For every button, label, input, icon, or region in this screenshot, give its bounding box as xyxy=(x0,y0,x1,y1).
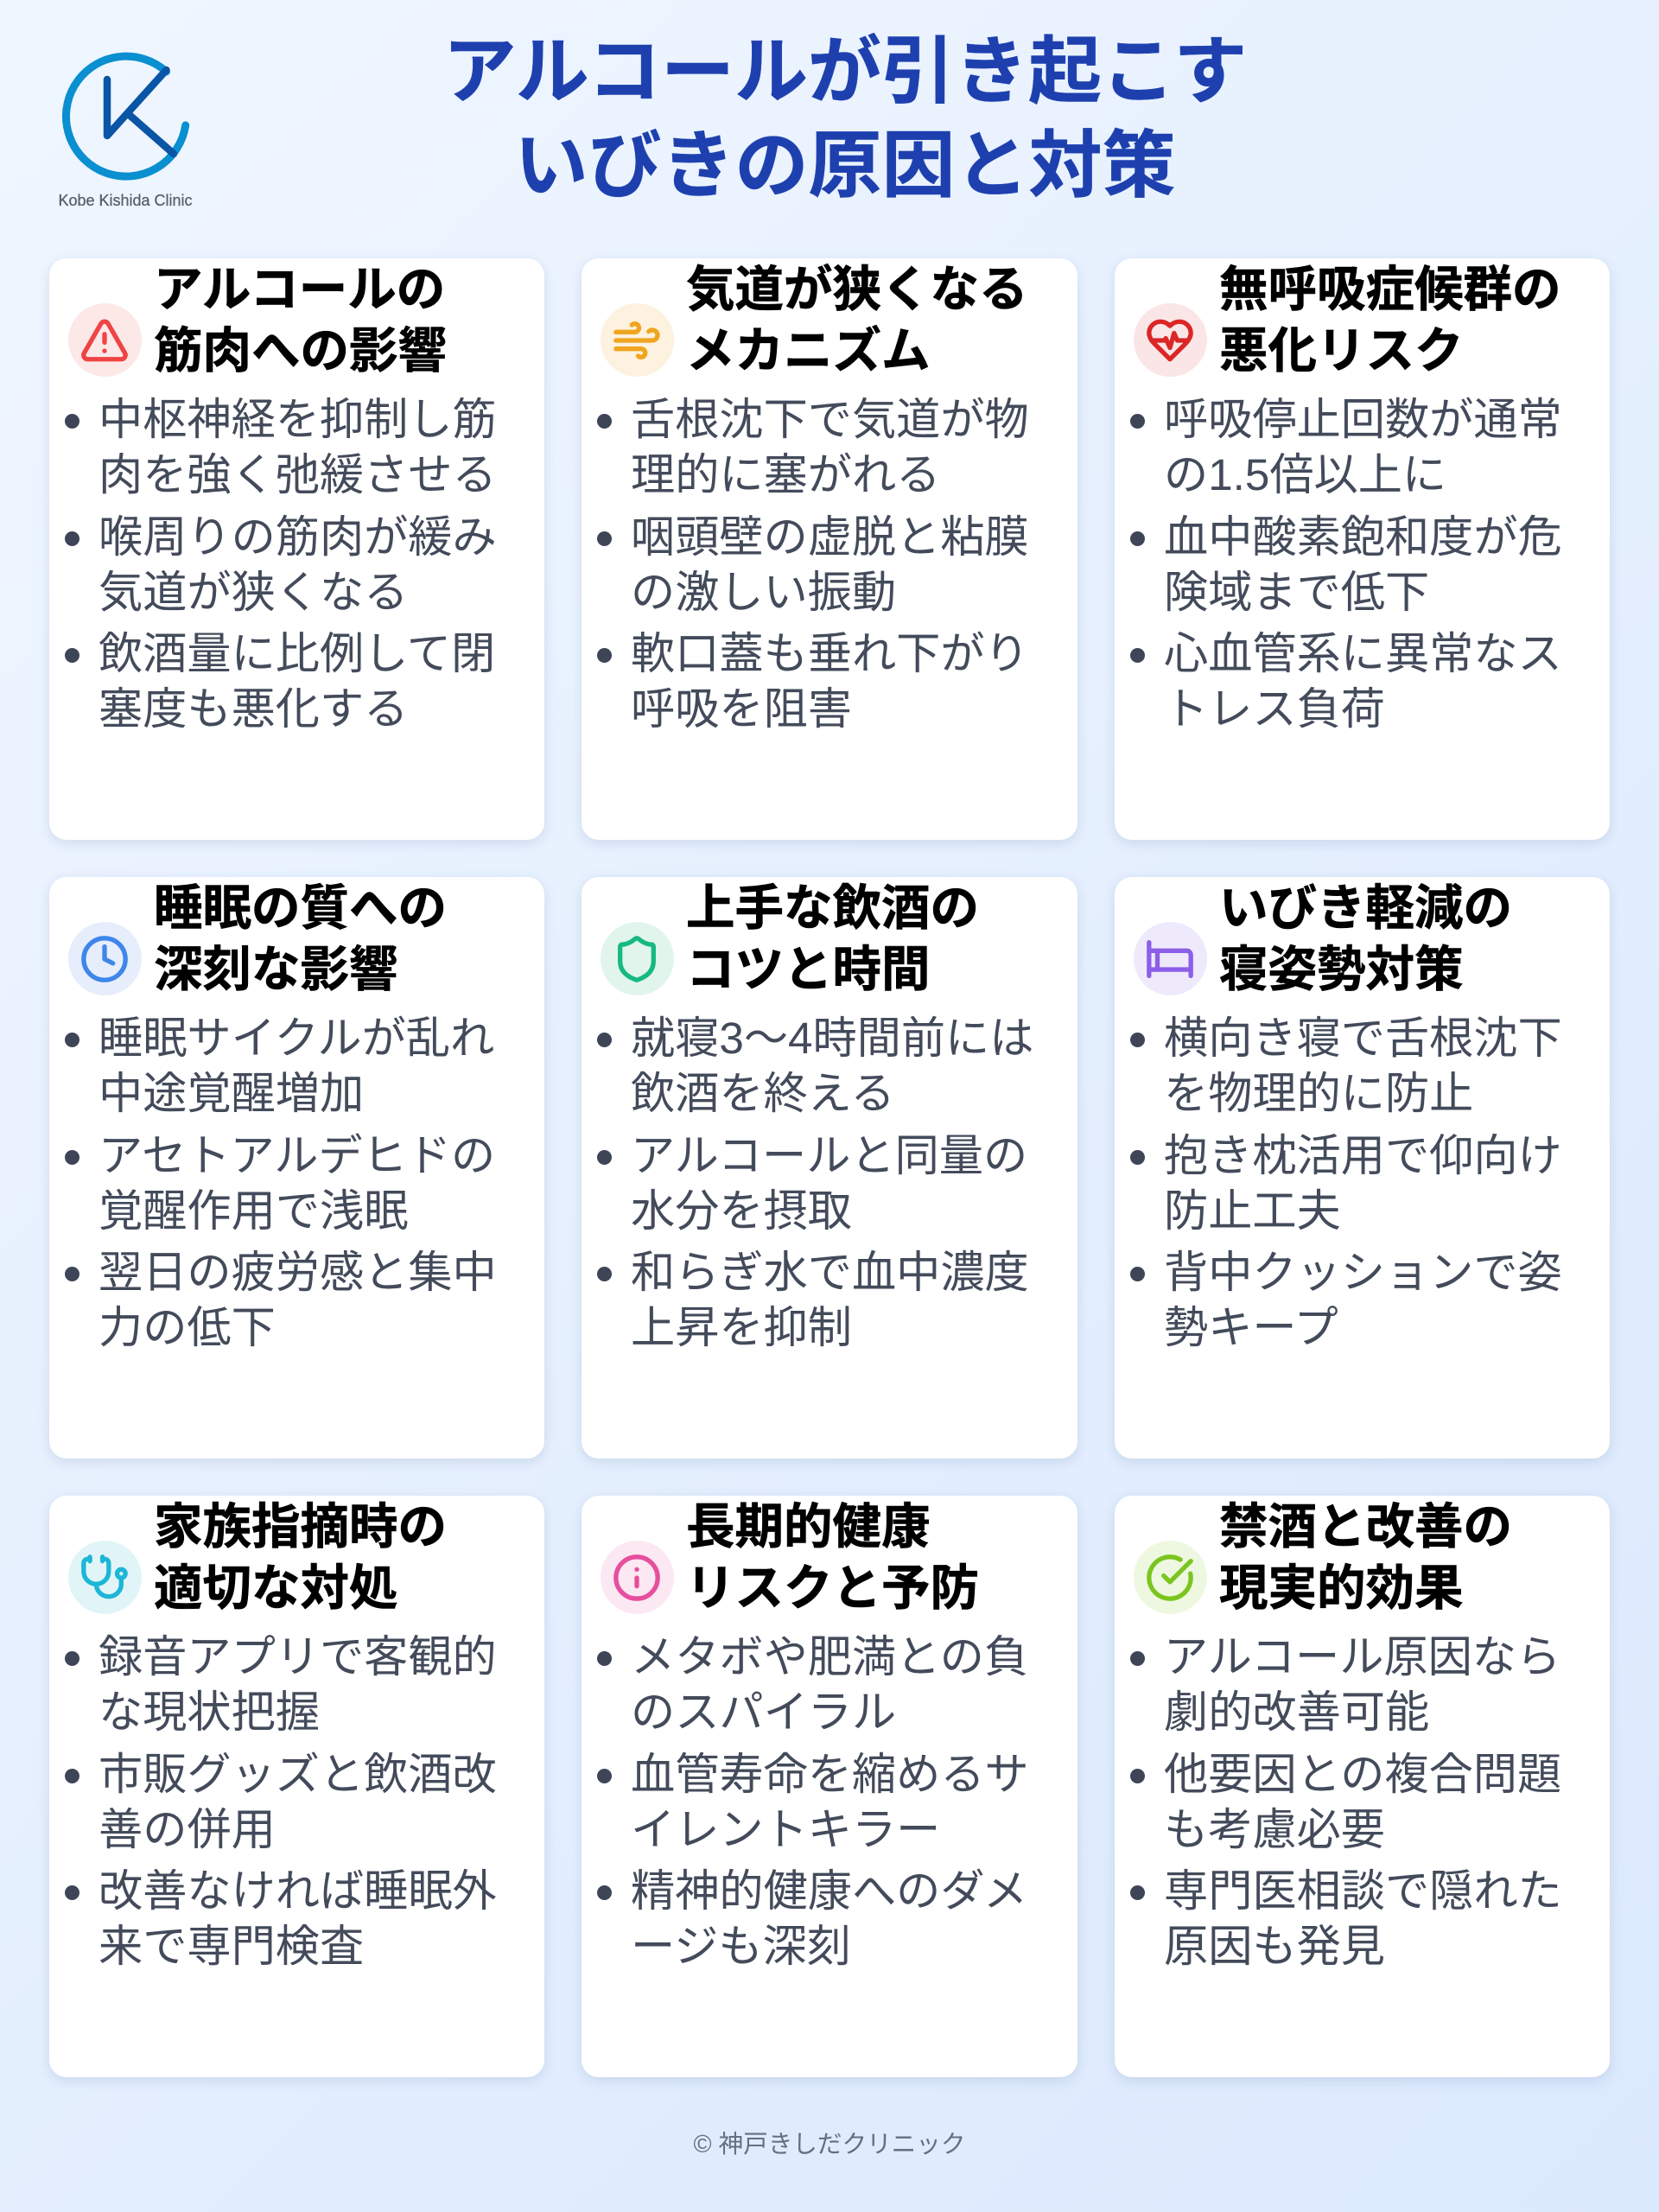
bullet list: 中枢神経を抑制し筋 xyxy=(99,395,497,444)
heading: メカニズム xyxy=(686,323,930,377)
bullet list: 原因も発見 xyxy=(1164,1922,1385,1971)
bullet list: 録音アプリで客観的 xyxy=(99,1632,497,1681)
bullet list: 水分を摂取 xyxy=(631,1186,852,1236)
bullet list: 舌根沈下で気道が物 xyxy=(631,395,1029,444)
heading xyxy=(686,1498,979,1614)
bullet list: も考慮必要 xyxy=(1164,1805,1385,1854)
bullet list: 軟口蓋も垂れ下がり xyxy=(631,629,1029,678)
bullet list: 飲酒量に比例して閉 xyxy=(99,629,495,678)
bullet list: 力の低下 xyxy=(99,1303,276,1352)
heading: 悪化リスク xyxy=(1219,323,1464,377)
heading: 無呼吸症候群の xyxy=(1219,261,1560,316)
bullet list: 中途覚醒増加 xyxy=(99,1069,364,1118)
heading: 適切な対処 xyxy=(154,1560,397,1614)
bullet list: イレントキラー xyxy=(631,1805,940,1854)
bullet list xyxy=(597,1014,1033,1352)
heading: リスクと予防 xyxy=(686,1560,979,1614)
icon: heart pulse xyxy=(1134,303,1206,377)
bullet list: 抱き枕活用で仰向け xyxy=(1164,1131,1562,1180)
heading: 寝姿勢対策 xyxy=(1219,942,1464,995)
panel: abstinence effects xyxy=(1115,1495,1610,2077)
bullet list: 和らぎ水で血中濃度 xyxy=(631,1248,1029,1297)
bullet list: 市販グッズと飲酒改 xyxy=(99,1750,497,1799)
icon: clock xyxy=(67,922,142,995)
panel: family response xyxy=(49,1495,544,2077)
panel: muscle effects xyxy=(49,257,544,840)
heading: 筋肉への影響 xyxy=(154,323,447,377)
bullet list: 改善なければ睡眠外 xyxy=(99,1866,497,1916)
bullet list: 血管寿命を縮めるサ xyxy=(631,1750,1029,1799)
title: いびきの原因と対策 xyxy=(514,124,1175,207)
bullet list: 覚醒作用で浅眠 xyxy=(99,1186,408,1236)
bullet list: メタボや肥満との負 xyxy=(631,1632,1028,1681)
bullet list: 劇的改善可能 xyxy=(1164,1688,1429,1737)
heading: 気道が狭くなる xyxy=(686,261,1028,316)
icon: warning triangle xyxy=(67,303,142,377)
bullet list: 勢キープ xyxy=(1164,1303,1338,1352)
bullet list: トレス負荷 xyxy=(1164,684,1385,734)
icon: K circle logo mark xyxy=(62,52,190,181)
bullet list: 来で専門検査 xyxy=(99,1922,364,1971)
bullet list: を物理的に防止 xyxy=(1164,1069,1473,1118)
bullet list: 心血管系に異常なス xyxy=(1164,629,1562,678)
heading: コツと時間 xyxy=(686,942,930,995)
bullet list: ージも深刻 xyxy=(631,1922,851,1971)
bullet list: のスパイラル xyxy=(631,1688,896,1737)
heading xyxy=(686,261,1028,377)
bullet list xyxy=(65,1632,497,1971)
heading: 禁酒と改善の xyxy=(1219,1498,1512,1554)
panel: sleep quality xyxy=(49,876,544,1459)
icon: shield xyxy=(600,922,674,995)
bullet list: 飲酒を終える xyxy=(631,1069,895,1118)
bullet list xyxy=(1130,1632,1562,1971)
bullet list: 精神的健康へのダメ xyxy=(631,1866,1027,1916)
heading: アルコールの xyxy=(154,261,445,316)
bullet list: 喉周りの筋肉が緩み xyxy=(99,512,497,562)
bullet list: 咽頭壁の虚脱と粘膜 xyxy=(631,512,1029,562)
heading xyxy=(154,261,447,377)
bullet list: 他要因との複合問題 xyxy=(1164,1750,1561,1799)
bullet list: 専門医相談で隠れた xyxy=(1164,1866,1562,1916)
bullet list: アルコール原因なら xyxy=(1164,1632,1560,1681)
bullet list: 翌日の疲労感と集中 xyxy=(99,1248,497,1297)
bullet list: 睡眠サイクルが乱れ xyxy=(99,1014,494,1063)
bullet list: 塞度も悪化する xyxy=(99,684,408,734)
heading: 現実的効果 xyxy=(1219,1560,1464,1614)
icon: check circle xyxy=(1134,1541,1206,1614)
heading xyxy=(1219,880,1512,995)
heading: いびき軽減の xyxy=(1219,880,1512,935)
footer: © 神戸きしだクリニック xyxy=(694,2131,965,2158)
title: アルコールが引き起こす xyxy=(443,31,1247,113)
icon: info xyxy=(600,1541,674,1614)
heading xyxy=(1219,1498,1512,1614)
heading xyxy=(1219,261,1560,377)
bullet list: 横向き寝で舌根沈下 xyxy=(1164,1014,1562,1063)
bullet list xyxy=(1130,1014,1562,1352)
heading: 上手な飲酒の xyxy=(686,880,979,935)
bullet list: 上昇を抑制 xyxy=(631,1303,852,1352)
bullet list: の1.5倍以上に xyxy=(1164,450,1446,499)
bullet list: 背中クッションで姿 xyxy=(1164,1248,1562,1297)
heading: 深刻な影響 xyxy=(154,942,397,995)
bullet list xyxy=(597,395,1029,734)
title xyxy=(443,31,1247,207)
panel: apnea risk xyxy=(1115,257,1610,840)
bullet list xyxy=(597,1632,1029,1971)
bullet list xyxy=(1130,395,1562,734)
heading: 長期的健康 xyxy=(686,1498,930,1554)
bullet list: 善の併用 xyxy=(99,1805,276,1854)
heading xyxy=(154,1498,447,1614)
logo: Kobe Kishida Clinic xyxy=(58,52,193,209)
icon: stethoscope xyxy=(67,1541,142,1614)
panel: drinking tips xyxy=(582,876,1077,1459)
bullet list: 理的に塞がれる xyxy=(631,450,940,499)
bullet list xyxy=(65,395,497,734)
bullet list: アセトアルデヒドの xyxy=(99,1131,495,1180)
bullet list: 呼吸を阻害 xyxy=(631,684,852,734)
heading: 睡眠の質への xyxy=(154,880,447,935)
bullet list: の激しい振動 xyxy=(631,568,896,617)
heading xyxy=(154,880,447,995)
heading: 家族指摘時の xyxy=(154,1498,447,1554)
bullet list: 血中酸素飽和度が危 xyxy=(1164,512,1562,562)
bullet list xyxy=(65,1014,497,1352)
bullet list: 険域まで低下 xyxy=(1164,568,1429,617)
bullet list: アルコールと同量の xyxy=(631,1131,1027,1180)
bullet list: 就寝3〜4時間前には xyxy=(631,1014,1033,1063)
icon: wind xyxy=(600,303,674,377)
bullet list: 防止工夫 xyxy=(1164,1186,1341,1236)
panel: sleep posture xyxy=(1115,876,1610,1459)
bullet list: 肉を強く弛緩させる xyxy=(99,450,497,499)
panel: long-term risk xyxy=(582,1495,1077,2077)
logo wordmark: Kobe Kishida Clinic xyxy=(58,192,193,209)
heading xyxy=(686,880,979,995)
bullet list: な現状把握 xyxy=(99,1688,320,1737)
icon: bed xyxy=(1134,922,1206,995)
bullet list: 呼吸停止回数が通常 xyxy=(1164,395,1562,444)
bullet list: 気道が狭くなる xyxy=(99,568,408,617)
panel: airway mechanism xyxy=(582,257,1077,840)
